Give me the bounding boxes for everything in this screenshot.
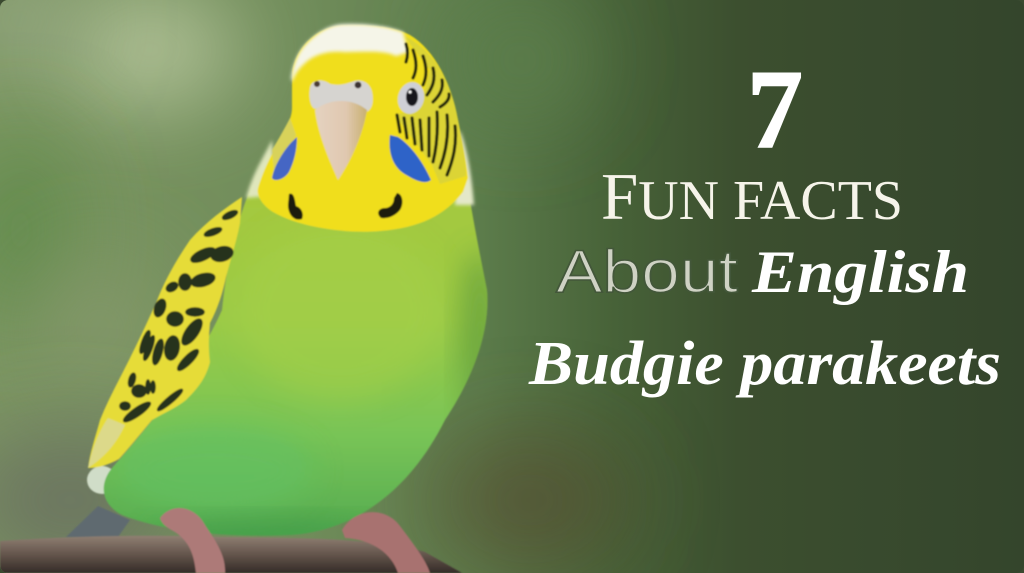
- title: [528, 48, 1001, 398]
- branch: [0, 536, 462, 573]
- body: [102, 195, 488, 536]
- eye: [396, 80, 426, 115]
- blue cheek left: [272, 137, 297, 180]
- line: Budgie parakeets: Budgie parakeets: [528, 330, 1001, 398]
- blurred background: [0, 0, 717, 573]
- wing: [88, 197, 242, 468]
- left pale stripes: [272, 118, 296, 172]
- left foot: [160, 508, 225, 573]
- pale neck sides: [246, 140, 276, 198]
- cere: [309, 80, 373, 112]
- numeral 7: 7: [747, 48, 803, 172]
- striped side of head: [395, 36, 466, 184]
- line: About English: English: [751, 239, 969, 305]
- line: About English: About: [556, 238, 738, 305]
- throat spots: [288, 193, 402, 220]
- beak: [315, 101, 367, 180]
- white tail tuft: [87, 466, 117, 494]
- line: About English: [555, 248, 966, 305]
- right foot: [342, 512, 430, 573]
- head: [258, 24, 468, 232]
- wing markings: [120, 209, 239, 424]
- parakeet: [0, 24, 500, 573]
- white crown: [291, 24, 408, 82]
- line: Fun facts: FUN FACTS: [601, 160, 903, 234]
- tail: [66, 506, 130, 537]
- head stripes: [397, 44, 456, 175]
- blue cheek right: [390, 135, 431, 182]
